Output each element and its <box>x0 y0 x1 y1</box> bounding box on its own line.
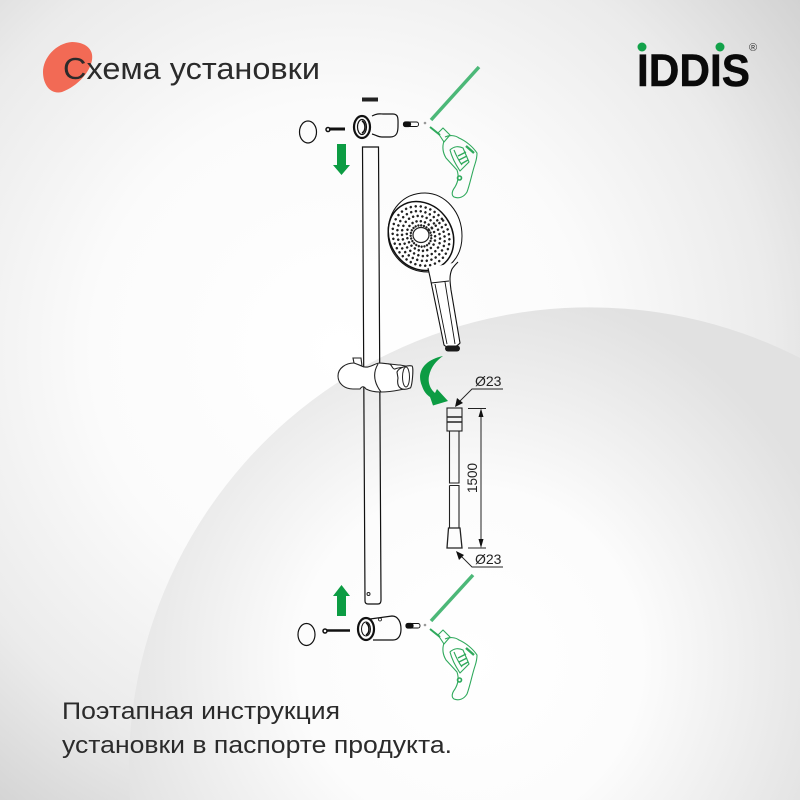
sliding rail <box>362 147 381 604</box>
icon: lower drill hole <box>424 624 426 626</box>
rail hole <box>367 592 370 596</box>
icon: top drill <box>430 127 477 198</box>
icon: screw <box>329 128 345 130</box>
hose bottom fitting <box>447 528 462 548</box>
icon: lower drill <box>430 629 477 700</box>
bottom mounting hardware <box>298 616 420 646</box>
icon: screw head <box>326 128 330 132</box>
dimension bottom diameter <box>456 551 503 567</box>
hose top fitting <box>447 408 462 431</box>
icon: lower cover ring <box>298 624 315 646</box>
logo: ® <box>749 42 757 54</box>
icon: small bracket part <box>362 98 378 102</box>
dimension bottom diameter: Ø23 <box>475 551 502 567</box>
dimension top diameter: Ø23 <box>475 373 502 389</box>
shower handle <box>428 262 460 347</box>
flexible hose <box>447 408 462 548</box>
slider clamp <box>338 358 413 392</box>
logo: IDDIS <box>637 45 750 96</box>
caption: установки в паспорте продукта. <box>62 732 452 759</box>
icon: top pencil mark <box>431 67 479 120</box>
dimension top diameter <box>455 373 503 407</box>
icon: coral blob <box>43 42 92 92</box>
title: Схема установки <box>63 51 320 86</box>
hose lower section <box>450 486 459 528</box>
icon: shower head <box>375 189 467 352</box>
caption: Поэтапная инструкция <box>62 698 340 725</box>
green arrow up <box>333 585 350 616</box>
icon: wall anchor <box>404 122 418 126</box>
hose upper section <box>450 431 459 483</box>
icon: drill hole <box>424 122 426 124</box>
icon: lower screw head <box>323 629 327 633</box>
icon: lower pencil mark <box>431 575 473 621</box>
icon: top bracket <box>354 114 398 138</box>
icon: cover ring <box>300 121 316 143</box>
top mounting hardware <box>300 98 418 143</box>
background arc shape <box>129 307 800 800</box>
dimension 1500: 1500 <box>465 463 480 493</box>
caption <box>62 698 452 759</box>
curved green arrow <box>420 356 448 406</box>
icon: lower screw <box>327 629 350 632</box>
icon: bottom bracket <box>358 616 401 640</box>
icon: lower wall anchor <box>406 624 420 628</box>
spray centre hole <box>413 228 429 242</box>
dimension 1500 <box>465 408 486 548</box>
green arrow down <box>333 144 350 175</box>
